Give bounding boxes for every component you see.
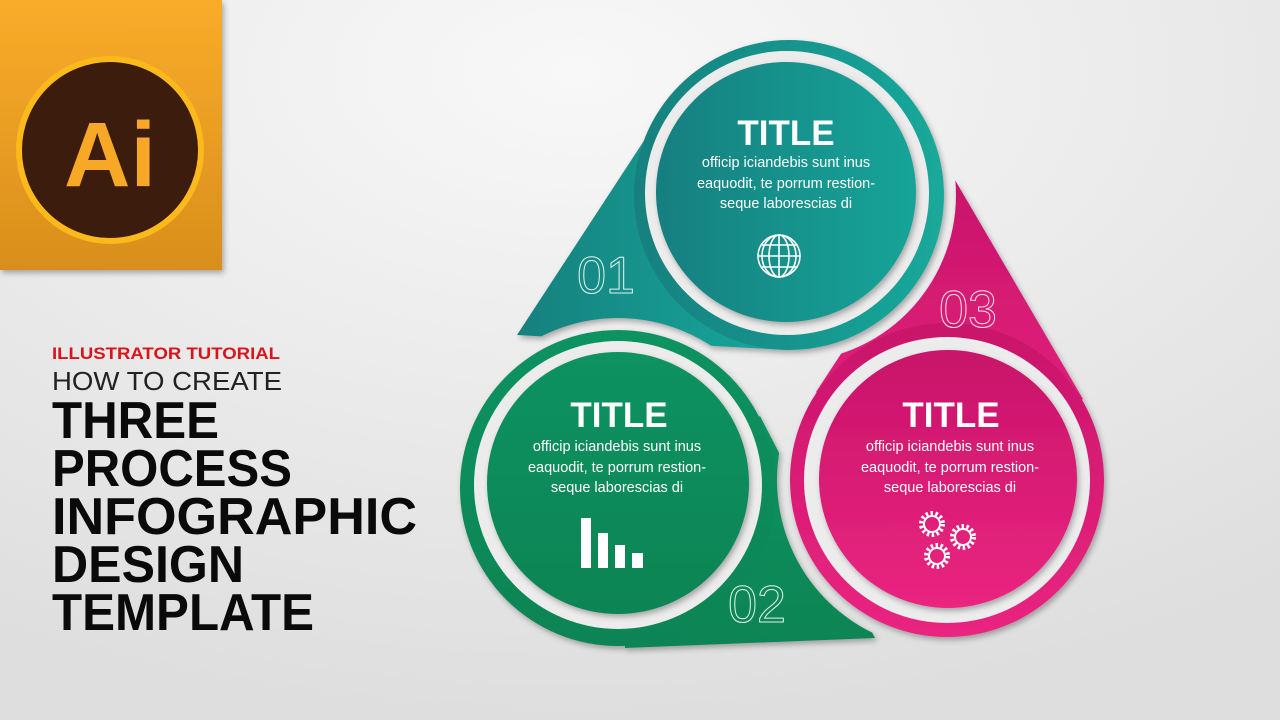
panel 01: teal: seque laborescias di xyxy=(720,196,852,212)
heading text block: TEMPLATE xyxy=(52,584,314,642)
number 01: 01 xyxy=(577,247,635,305)
logo: Adobe Illustrator: Ai xyxy=(64,104,156,206)
icon: bar chart xyxy=(581,518,643,568)
panel 03: magenta: seque laborescias di xyxy=(884,480,1016,496)
panel 01: teal: eaquodit, te porrum restion- xyxy=(697,176,875,192)
panel 02: green xyxy=(460,330,875,648)
heading text block: THREE xyxy=(52,392,219,450)
panel 03: magenta xyxy=(790,180,1104,637)
panel 02: green: seque laborescias di xyxy=(551,480,683,496)
heading text block: DESIGN xyxy=(52,536,244,594)
panel 01: teal xyxy=(517,40,944,350)
panel 03: magenta: TITLE xyxy=(902,396,1000,435)
heading text block: PROCESS xyxy=(52,440,292,498)
panel 02: green: eaquodit, te porrum restion- xyxy=(528,460,706,476)
panel 02: green: officip iciandebis sunt inus xyxy=(533,439,701,455)
panel 03: magenta: eaquodit, te porrum restion- xyxy=(861,460,1039,476)
heading text block xyxy=(52,344,417,642)
number 03: 03 xyxy=(939,281,997,339)
panel 01: teal: officip iciandebis sunt inus xyxy=(702,155,870,171)
heading text block: ILLUSTRATOR TUTORIAL xyxy=(52,344,280,363)
heading text block: HOW TO CREATE xyxy=(52,366,282,396)
icon: gears xyxy=(921,513,974,567)
panel 02: green: TITLE xyxy=(570,396,668,435)
panel 03: magenta: officip iciandebis sunt inus xyxy=(866,439,1034,455)
heading text block: INFOGRAPHIC xyxy=(52,488,417,546)
icon: globe xyxy=(758,235,800,277)
logo: Adobe Illustrator xyxy=(0,0,222,270)
panel 01: teal: TITLE xyxy=(737,114,835,153)
number 02: 02 xyxy=(728,576,786,634)
